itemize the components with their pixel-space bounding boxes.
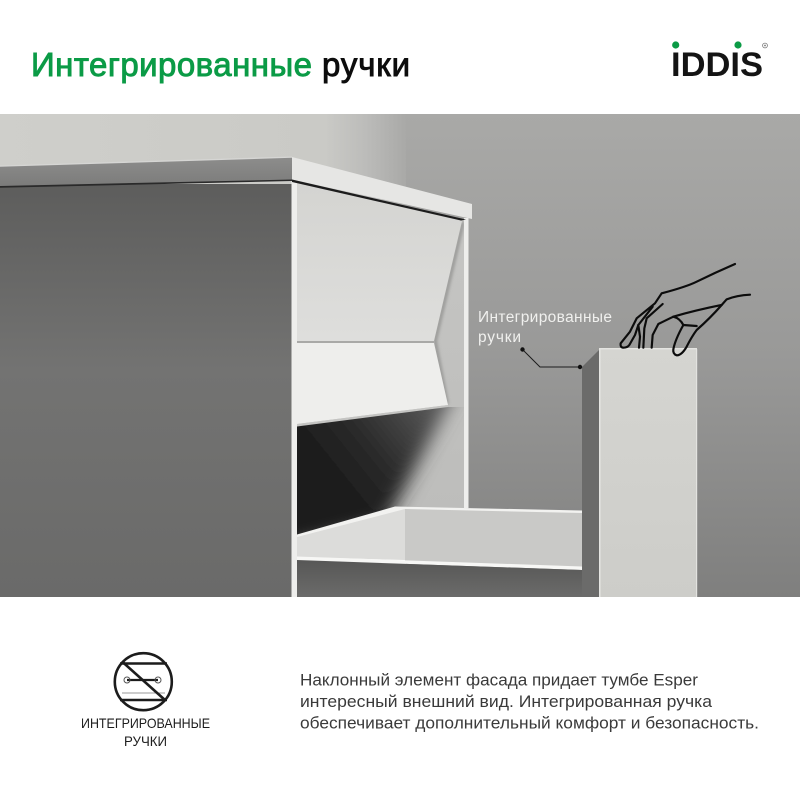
cabinet side panel bbox=[0, 184, 292, 597]
icon caption: ИНТЕГРИРОВАННЫЕ bbox=[81, 715, 210, 731]
description text: обеспечивает дополнительный комфорт и безопасность. bbox=[300, 714, 759, 732]
product photo panel bbox=[0, 114, 800, 597]
description text: Наклонный элемент фасада придает тумбе Esper bbox=[300, 670, 698, 690]
integrated handle gap bbox=[297, 341, 435, 344]
cabinet interior side panel bbox=[297, 183, 468, 511]
callout label: Интегрированные bbox=[478, 309, 612, 326]
drawer back panel bbox=[405, 508, 582, 568]
icon: hand line drawing bbox=[621, 264, 750, 355]
wall: left section bbox=[0, 114, 406, 234]
wall: right section bbox=[406, 114, 800, 597]
callout leader line bbox=[520, 347, 582, 369]
lower panel edge bbox=[297, 405, 448, 426]
countertop shadow line bbox=[292, 180, 466, 220]
callout label bbox=[478, 309, 612, 346]
logo: IDDIS: IDDIS bbox=[671, 46, 763, 84]
icon caption: РУЧКИ bbox=[124, 733, 167, 749]
inclined upper front panel bbox=[297, 183, 462, 341]
pulled drawer side bbox=[582, 350, 599, 597]
drawer front panel bbox=[297, 560, 582, 597]
description text bbox=[300, 670, 759, 732]
countertop front edge bbox=[292, 157, 472, 219]
lower front panel bbox=[297, 343, 448, 424]
title: Интегрированные bbox=[31, 46, 312, 83]
drawer front rim bbox=[297, 556, 582, 570]
white frame strips bbox=[292, 181, 468, 597]
pulled drawer face bbox=[599, 348, 697, 597]
soft shadow along inclined fold bbox=[435, 222, 463, 404]
countertop side edge bbox=[0, 156, 292, 188]
dark recess under front bbox=[297, 407, 462, 534]
description text: интересный внешний вид. Интегрированная ручка bbox=[300, 692, 713, 711]
icon caption bbox=[81, 715, 210, 749]
drawer top rim bbox=[297, 506, 582, 537]
icon: integrated handle symbol bbox=[115, 653, 172, 710]
drawer inner left wall bbox=[297, 507, 405, 560]
callout label: ручки bbox=[478, 329, 521, 346]
title: ручки bbox=[322, 46, 410, 83]
